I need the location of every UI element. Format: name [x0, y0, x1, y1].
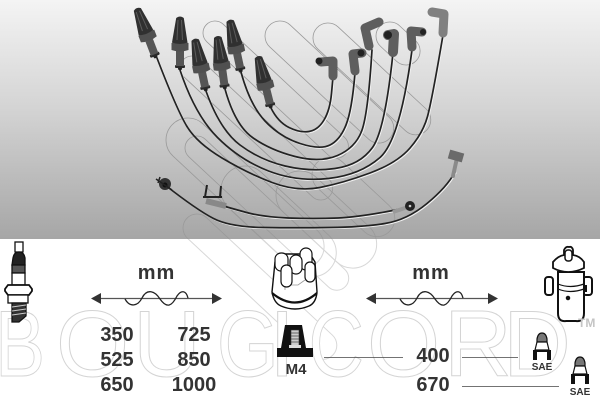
clip terminal — [203, 185, 226, 206]
watermark: BOUGICORD lettering: R — [444, 291, 512, 396]
left length values: 350 — [100, 324, 134, 346]
right heading mm: mm — [412, 262, 450, 284]
HT lead values: 670 — [416, 374, 450, 396]
watermark: BOUGICORD lettering: C — [308, 292, 364, 397]
watermark: paperclip outlines on photo — [166, 20, 432, 239]
left length values — [100, 324, 216, 396]
watermark: BOUGICORD lettering — [0, 291, 571, 397]
leader line 400 — [324, 356, 403, 358]
left length values: 725 — [177, 324, 211, 346]
SAE label 2: SAE — [570, 387, 591, 398]
leader line to SAE 1 — [462, 356, 518, 358]
left length values: 650 — [100, 374, 134, 396]
HT lead values — [416, 345, 450, 396]
SAE label 1: SAE — [532, 362, 553, 373]
ring terminal — [393, 201, 415, 212]
M4 label: M4 — [286, 361, 307, 378]
ignition cable set photo — [129, 5, 463, 229]
icon: SAE terminal 2 — [571, 357, 589, 384]
right length arrow — [366, 292, 498, 305]
watermark: BOUGICORD lettering: I — [269, 291, 295, 396]
left lug terminal — [156, 177, 172, 190]
icon: spark plug — [5, 242, 32, 322]
leader line to SAE 2 — [462, 386, 559, 388]
icon: ignition coil — [545, 247, 592, 321]
trademark: TM — [578, 316, 595, 330]
cables — [157, 35, 456, 229]
left length values: 525 — [100, 349, 134, 371]
watermark: BOUGICORD lettering: D — [503, 291, 571, 396]
photo background panel — [0, 0, 600, 239]
HT lead values: 400 — [416, 345, 450, 367]
left length values: 1000 — [172, 374, 216, 396]
left heading mm: mm — [138, 262, 175, 284]
icon: distributor cap — [272, 248, 317, 309]
distributor connectors — [316, 12, 463, 176]
left length arrow — [91, 292, 222, 305]
white spec panel — [0, 239, 600, 400]
icon: M4 terminal — [277, 325, 313, 357]
watermark: BOUGICORD lettering: O — [367, 291, 440, 396]
left length values: 850 — [177, 349, 211, 371]
watermark: BOUGICORD lettering: G — [217, 292, 279, 396]
icon: SAE terminal 1 — [533, 333, 551, 360]
watermark: BOUGICORD lettering: U — [133, 291, 201, 396]
spark plug boots — [129, 5, 279, 110]
watermark: BOUGICORD lettering: O — [56, 291, 129, 396]
watermark: paperclip outlines on white panel — [188, 239, 378, 360]
